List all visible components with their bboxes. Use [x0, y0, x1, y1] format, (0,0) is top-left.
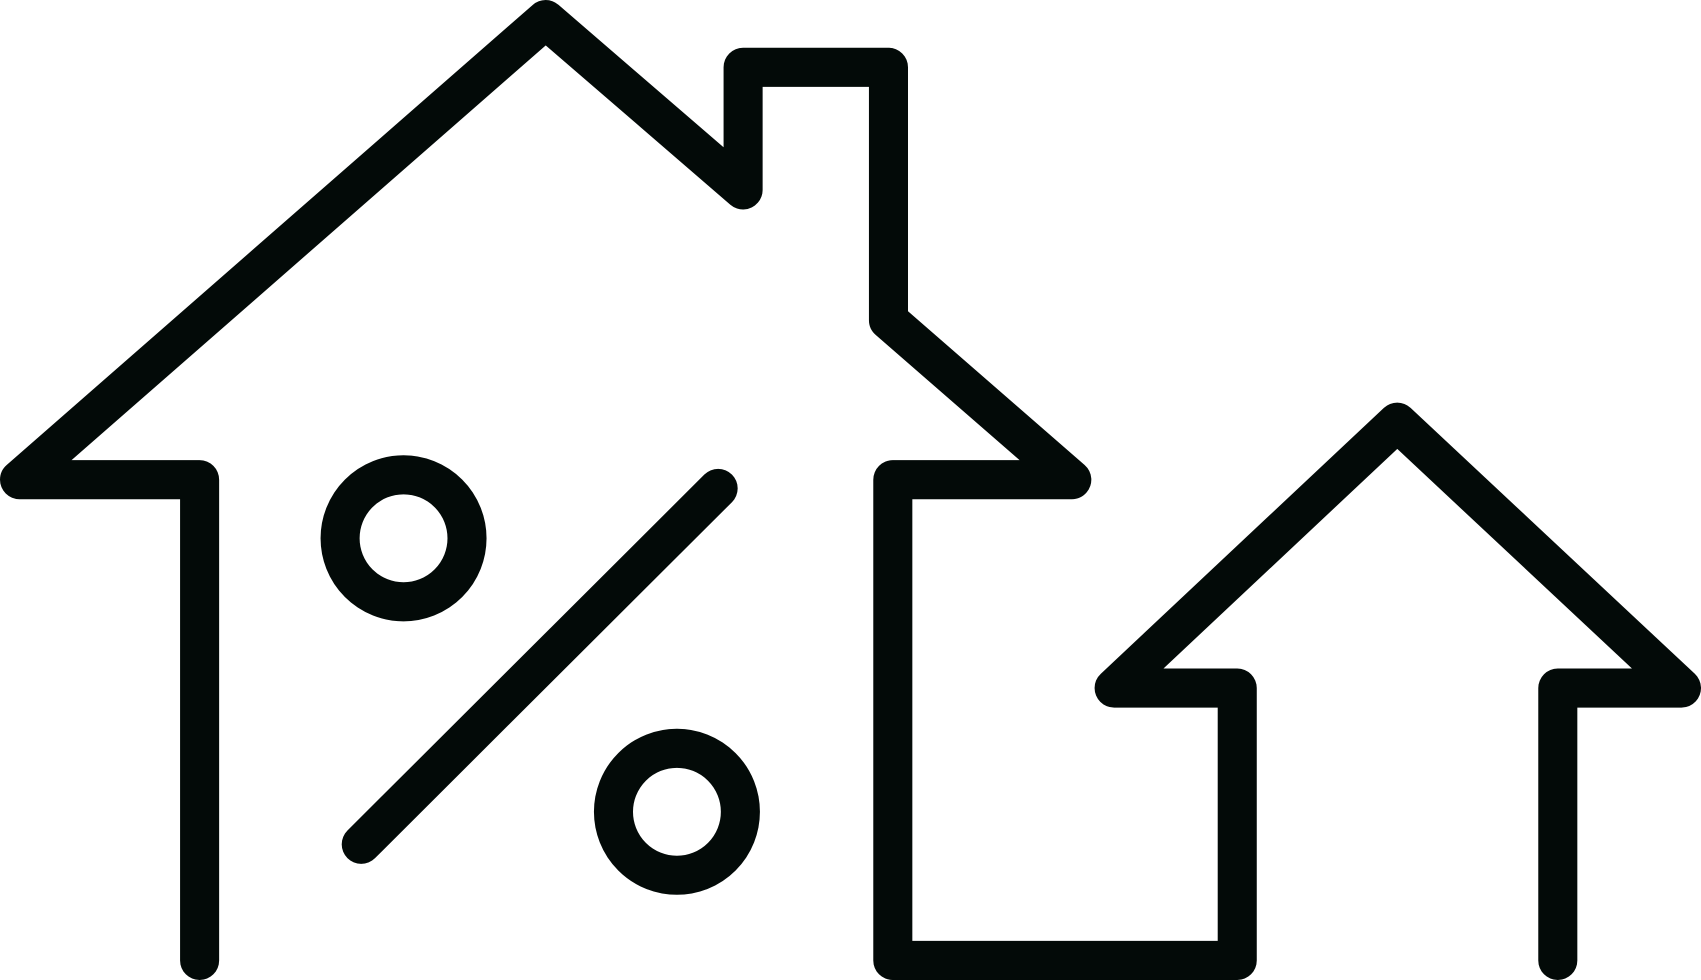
- percent lower circle: [613, 748, 740, 875]
- percent upper circle: [340, 475, 467, 602]
- icon: percent sign: [340, 475, 740, 875]
- percent slash: [361, 488, 718, 844]
